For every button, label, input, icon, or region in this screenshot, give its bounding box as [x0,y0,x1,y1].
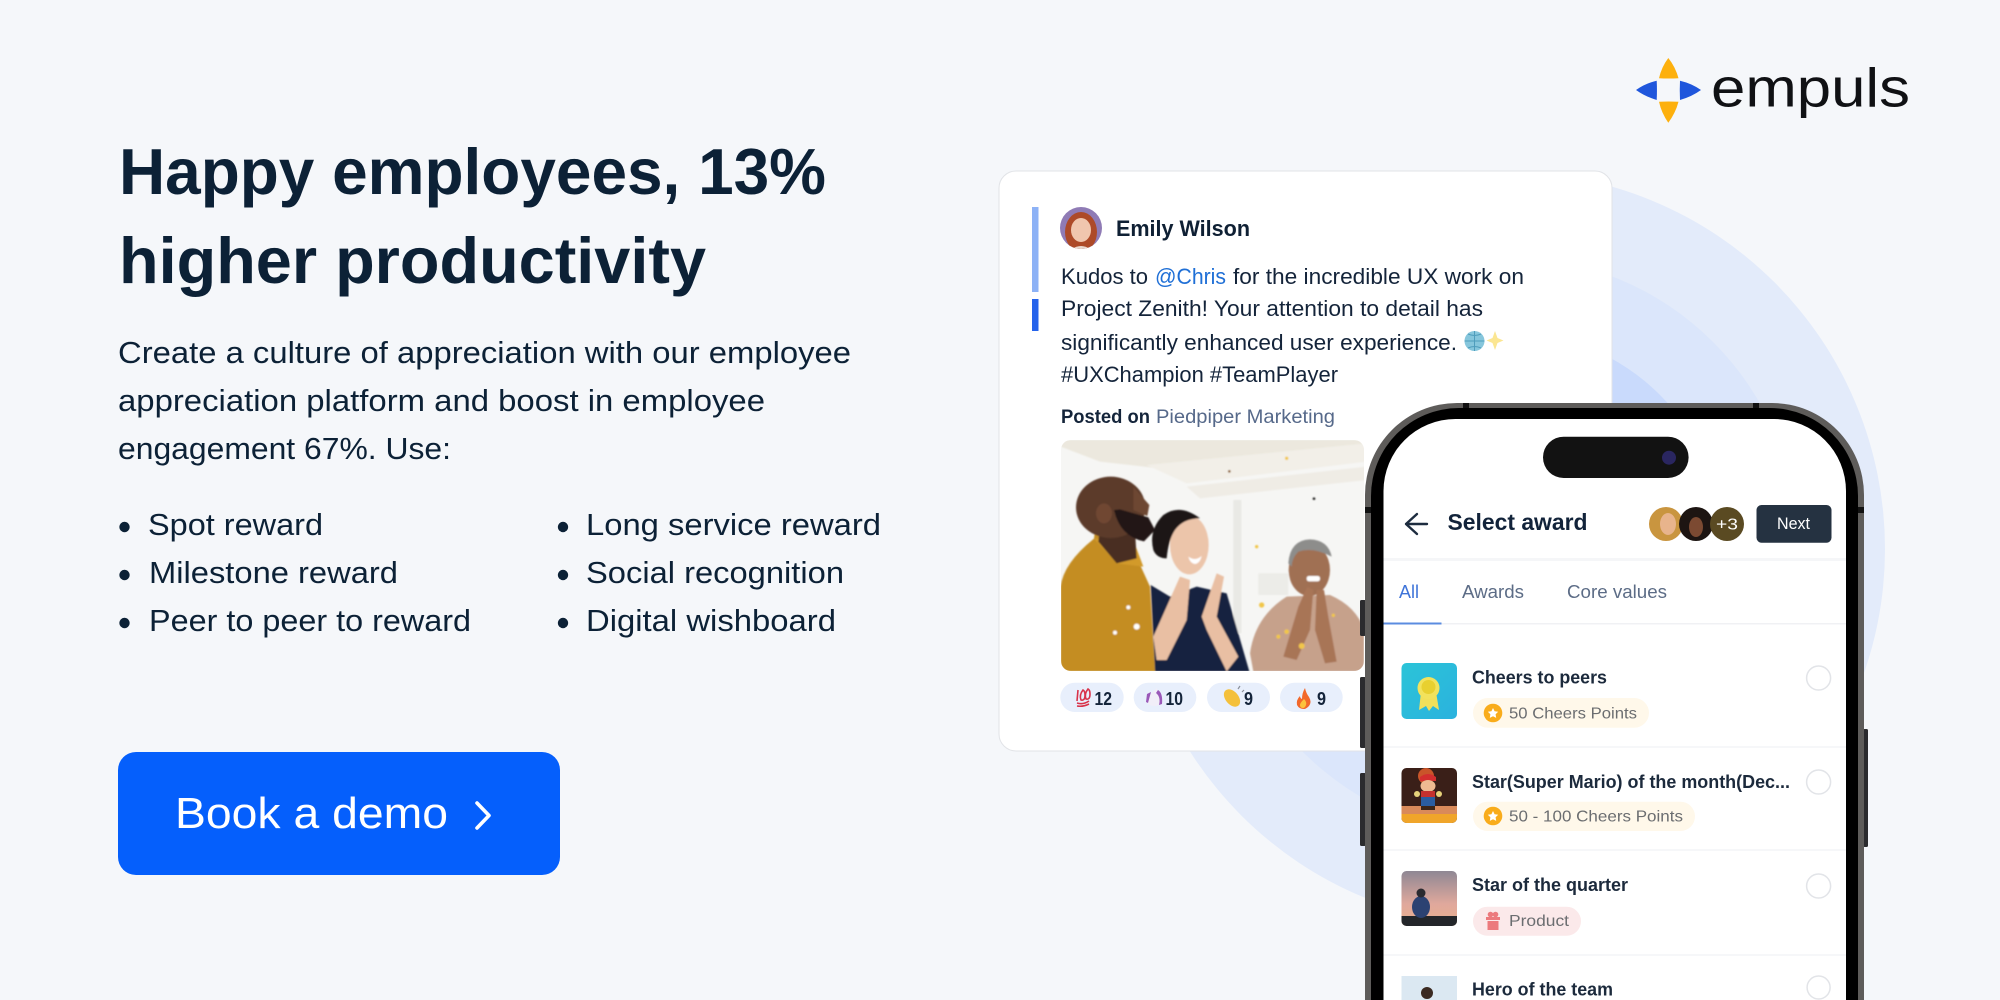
reward list: left column: Peer to peer to reward [149,603,471,638]
reaction: hundred points, 12: 12 [1094,689,1112,709]
post text: #UXChampion #TeamPlayer [1061,362,1338,387]
dynamic island [1543,437,1689,478]
avatar group: +3 [1716,516,1738,534]
button: Book a demo: Book a demo [175,789,448,838]
button: Next [1756,505,1832,543]
thumbnail: silhouette at sunset [1401,871,1457,926]
icon: back arrow [1406,514,1427,534]
list item: Hero of the team: Hero of the team [1472,980,1613,1000]
panel: phone mockup [1360,403,1868,1000]
reward list: right column: Digital wishboard [586,603,836,638]
confetti [1255,457,1335,649]
accent bars [1032,207,1038,331]
button: Book a demo [118,752,560,875]
list item: Hero of the team [1402,976,1830,1000]
product pill [1473,907,1581,936]
header divider [1384,558,1846,561]
product pill: Product [1509,913,1570,930]
reaction: hundred points, 12 [1060,683,1124,712]
older woman [1250,595,1364,671]
reward list: left column: Spot reward [148,507,323,542]
icon: globe and sparkles emoji [1464,331,1504,351]
author name: Emily Wilson [1116,216,1250,241]
heading: Happy employees, 13% [119,135,826,208]
post text: Project Zenith! Your attention to detail has [1061,296,1483,321]
woman in navy [1151,585,1249,671]
radio button [1807,874,1831,898]
reaction: unicorn, 10 [1134,683,1196,712]
reaction: clapping hands, 9 [1207,683,1270,712]
tabs: All [1399,582,1419,602]
photo: three colleagues celebrating [1061,440,1367,671]
screen title: Select award [1448,509,1588,535]
reaction: unicorn, 10: 10 [1166,689,1183,709]
intro paragraph: Create a culture of appreciation with our employee [118,335,851,370]
thumbnail: person portrait [1402,976,1457,1000]
thumbnail: yellow ribbon [1401,663,1457,719]
reward list: left column [119,507,471,638]
radio button [1807,976,1830,999]
list item: Cheers to peers: Cheers to peers [1472,668,1607,688]
post text: for the incredible UX work on [1233,264,1524,289]
radio button [1807,770,1831,794]
tabs: Awards [1462,582,1524,602]
list item divider [1384,746,1846,748]
list item: Star (Super Mario) of the month: Star(Super Mario) of the month(Dec... [1472,772,1790,792]
list item divider [1384,849,1846,851]
reward list: right column: Long service reward [586,507,881,542]
list item: Star of the quarter: Star of the quarter [1472,875,1628,895]
reward list: right column: Social recognition [586,555,844,590]
heading [119,135,826,297]
icon: chevron right [477,803,489,828]
post text: significantly enhanced user experience. [1061,330,1457,355]
list item: Star (Super Mario) of the month [1401,768,1831,831]
list item divider [1384,954,1846,956]
avatar: Emily [1060,207,1102,252]
man [1061,517,1155,671]
reward list: left column: Milestone reward [149,555,398,590]
phone frame [1365,403,1864,1000]
logo wordmark: empuls [1711,56,1910,118]
intro paragraph: appreciation platform and boost in employee [118,383,765,418]
posted on line: Posted on [1061,406,1150,428]
icon: four-point logo mark [1636,58,1701,123]
points pill: 50 Cheers Points [1509,706,1637,722]
button: Next: Next [1777,515,1810,533]
intro paragraph: engagement 67%. Use: [118,431,451,466]
radio button [1807,666,1831,690]
avatar group [1649,507,1744,541]
background concentric circles [1131,172,1885,926]
list item: Cheers to peers [1401,663,1831,728]
intro paragraph [118,335,851,466]
heading: higher productivity [119,224,706,297]
logo: empuls [1636,56,1910,123]
posted on line [1061,406,1335,428]
post text: Kudos to [1061,264,1148,289]
reaction: fire, 9: 9 [1317,689,1326,709]
points pill [1473,802,1695,831]
thumbnail: Mario figure [1401,768,1457,823]
post text [1061,264,1524,387]
tabs [1384,582,1846,624]
points pill: 50 - 100 Cheers Points [1509,808,1683,826]
reaction: clapping hands, 9: 9 [1244,689,1253,709]
reaction: fire, 9 [1280,683,1343,712]
posted on line: Piedpiper Marketing [1156,406,1335,428]
list item: Star of the quarter [1401,871,1831,936]
reward list: right column [558,507,881,638]
panel: kudos post card [999,171,1612,751]
post text: @Chris [1155,264,1226,289]
tabs: Core values [1567,582,1667,602]
points pill [1473,698,1649,728]
phone side buttons [1360,600,1868,847]
